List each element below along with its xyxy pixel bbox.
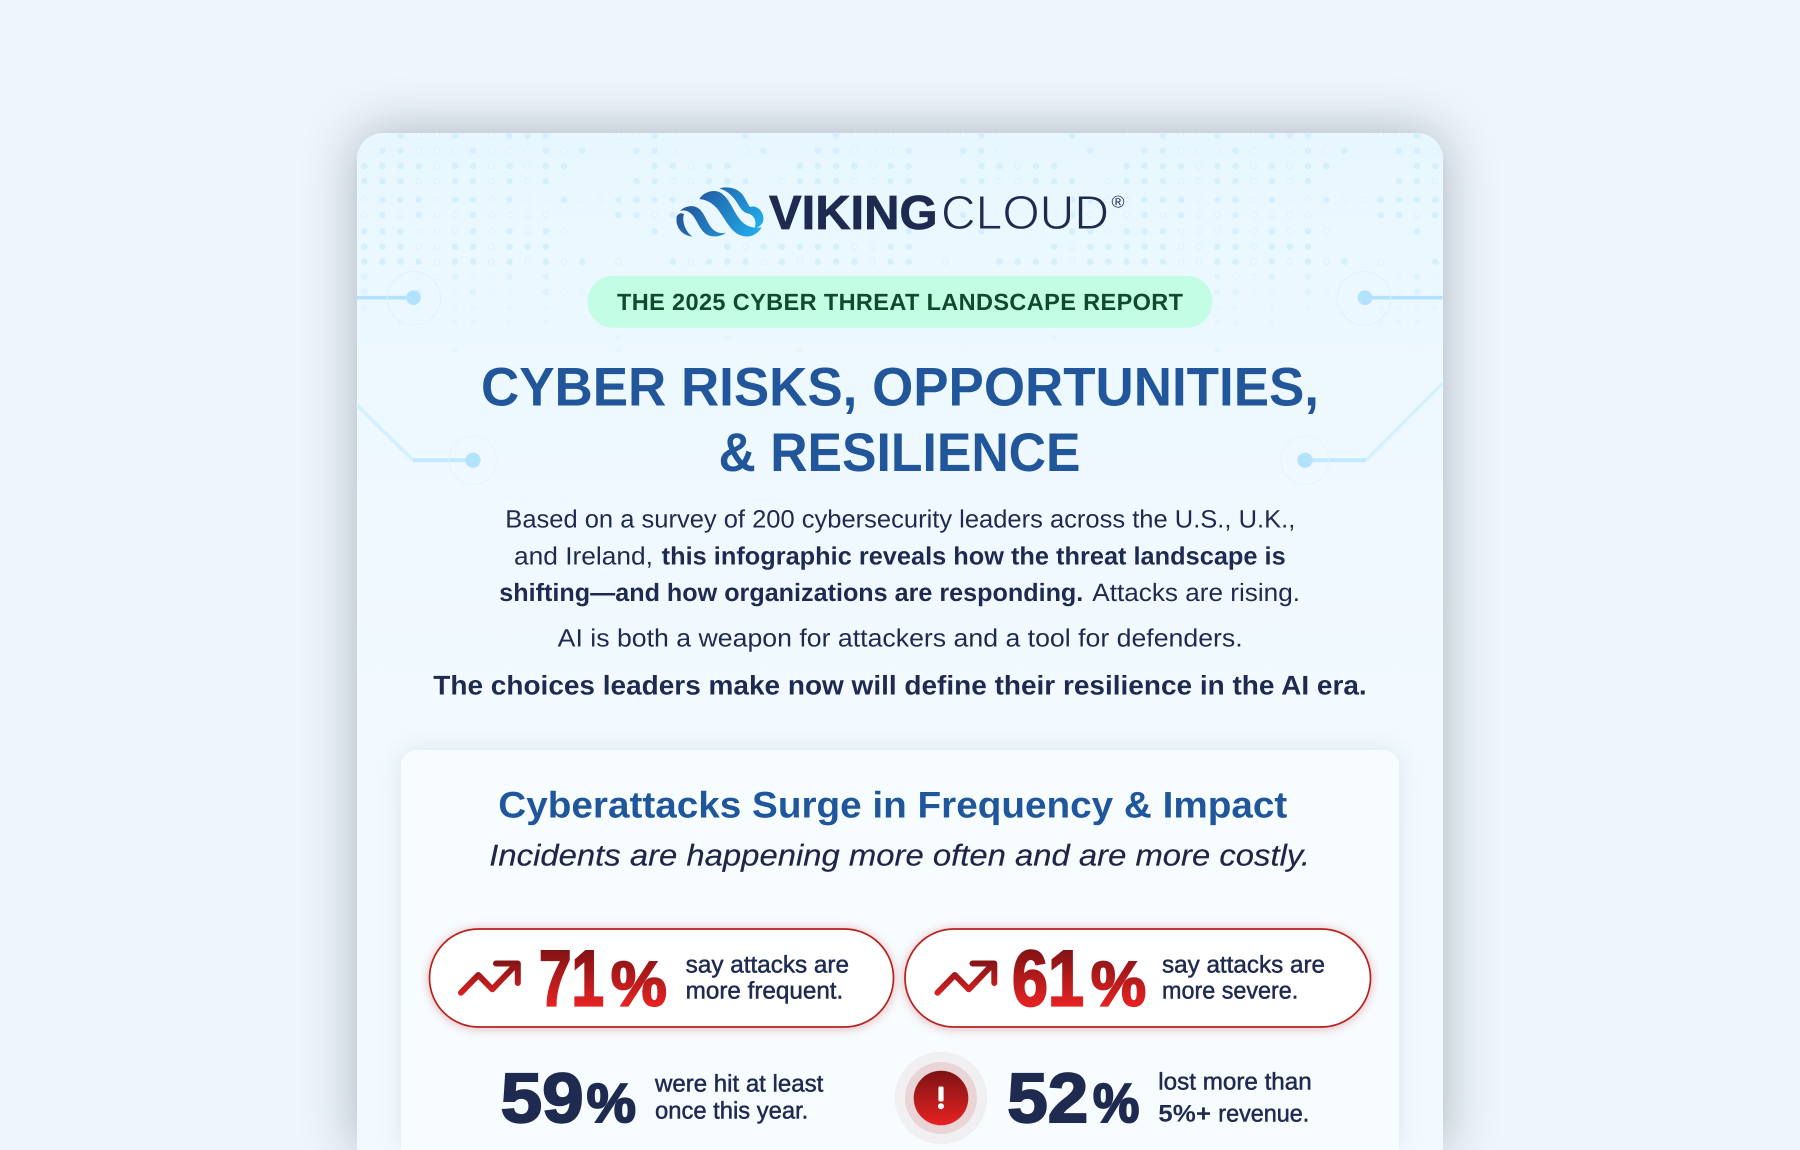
stat: 59% hit at least once: once this year.: [655, 1097, 808, 1124]
stat: 59% hit at least once: were hit at least: [654, 1071, 824, 1098]
title: CYBER RISKS, OPPORTUNITIES,: [481, 356, 1319, 418]
title: [481, 356, 1319, 483]
intro text block: shifting—and how organizations are responding.: [499, 579, 1083, 607]
icon: cloud waves: [676, 187, 763, 237]
intro text block: Attacks are rising.: [1092, 579, 1300, 607]
badge: report name: [588, 276, 1212, 328]
intro text block: [433, 506, 1367, 700]
infographic artwork and text: [356, 132, 1444, 1144]
circuit node: upper right: [1337, 272, 1442, 325]
circuit trace: lower left: [357, 405, 497, 484]
stat: 59% hit at least once: 59: [501, 1059, 584, 1137]
intro text block: this infographic reveals how the threat landscape is: [662, 542, 1286, 570]
stat: 52% lost revenue: %: [1093, 1072, 1139, 1134]
stat pill: 61% more severe: 61: [1012, 934, 1084, 1022]
stat: 59% hit at least once: %: [587, 1072, 636, 1134]
stat pill: 61% more severe: %: [1091, 950, 1146, 1020]
logo: VikingCloud: ®: [1112, 192, 1125, 212]
intro text block: Based on a survey of 200 cybersecurity leaders across the U.S., U.K.,: [505, 506, 1295, 534]
intro text block: AI is both a weapon for attackers and a tool for defenders.: [558, 625, 1243, 653]
icon: alert circle: [895, 1052, 987, 1144]
section subtitle: Incidents are happening more often and are more costly.: [489, 840, 1310, 873]
stat pill: 61% more severe: more severe.: [1162, 978, 1298, 1005]
stat: 59% hit at least once: [501, 1059, 824, 1137]
logo: VikingCloud: [676, 187, 1125, 240]
stat pill: 71% more frequent: more frequent.: [686, 978, 843, 1005]
stat pill: 71% more frequent: [430, 929, 894, 1027]
stat: 52% lost revenue: lost more than: [1158, 1068, 1312, 1095]
circuit trace: lower right: [1281, 383, 1442, 484]
stat: 52% lost revenue: revenue.: [1218, 1101, 1309, 1128]
stat pill: 71% more frequent: say attacks are: [686, 951, 849, 978]
stat: 52% lost revenue: [1007, 1059, 1312, 1137]
icon: rising arrow: [938, 964, 994, 993]
stat pill: 71% more frequent: %: [611, 950, 667, 1020]
stat pill: 61% more severe: say attacks are: [1162, 951, 1325, 978]
intro text block: The choices leaders make now will define their resilience in the AI era.: [433, 670, 1367, 700]
title: & RESILIENCE: [718, 422, 1080, 483]
stat pill: 71% more frequent: 71: [539, 934, 604, 1022]
stat pill: 61% more severe: [905, 929, 1370, 1027]
intro text block: and Ireland,: [514, 542, 653, 570]
stat: 52% lost revenue: 52: [1007, 1059, 1088, 1137]
badge: report name: THE 2025 CYBER THREAT LANDSCAPE REPORT: [617, 289, 1184, 315]
panel: cyberattacks statistics: [401, 750, 1399, 1150]
section heading: Cyberattacks Surge in Frequency & Impact: [498, 784, 1287, 825]
circuit node: upper left: [357, 272, 441, 325]
dot pattern background: [361, 132, 1438, 295]
logo: VikingCloud: VIKING: [769, 187, 938, 240]
panel: report card background: [357, 133, 1442, 1150]
logo: VikingCloud: CLOUD: [941, 187, 1109, 240]
stat: 52% lost revenue: 5%+: [1158, 1101, 1211, 1128]
icon: rising arrow: [461, 964, 518, 993]
